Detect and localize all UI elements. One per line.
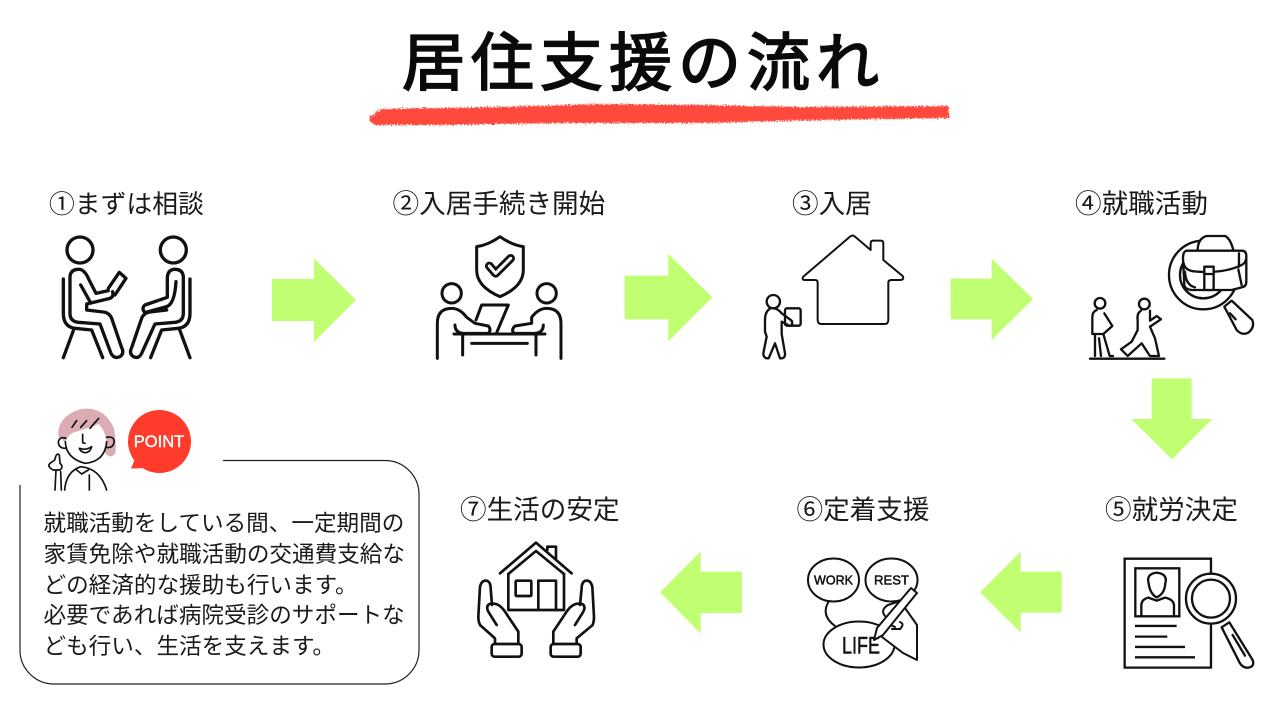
step 6 label: ⑥定着支援	[796, 495, 929, 525]
badge text: POINT	[134, 433, 184, 451]
callout text: ども行い、生活を支えます。	[44, 634, 335, 659]
icon: job search with briefcase and people	[1090, 236, 1253, 359]
rest label: REST	[874, 572, 909, 588]
arrow 4 to 5	[1131, 378, 1212, 459]
title underline brush stroke	[370, 104, 949, 125]
arrow 6 to 7	[660, 551, 742, 633]
step 3 label: ③入居	[792, 189, 872, 219]
callout text: 必要であれば病院受診のサポートな	[44, 603, 405, 628]
step 4 label: ④就職活動	[1075, 189, 1208, 219]
icon: resume with magnifying glass	[1125, 559, 1253, 668]
icon: hands holding a house	[478, 543, 594, 657]
icon: work rest life balance with pencil	[808, 558, 918, 668]
step 7 label: ⑦生活の安定	[460, 495, 620, 525]
callout text: 家賃免除や就職活動の交通費支給な	[44, 542, 405, 567]
panel: point callout	[20, 460, 419, 684]
arrow 5 to 6	[980, 552, 1062, 633]
arrow 1 to 2	[272, 258, 356, 342]
step 5 label: ⑤就労決定	[1105, 495, 1238, 525]
badge: point speech bubble	[128, 410, 191, 473]
step 1 label: ①まずは相談	[49, 190, 204, 219]
life label: LIFE	[842, 632, 880, 660]
title: 居住支援の流れ	[402, 29, 885, 99]
step 2 label: ②入居手続き開始	[392, 189, 605, 219]
callout text: 就職活動をしている間、一定期間の	[44, 511, 404, 536]
callout text: どの経済的な援助も行います。	[44, 573, 358, 598]
hand and pencil	[874, 588, 918, 660]
icon: shield and meeting at a desk	[437, 237, 561, 358]
icon: house and person carrying a box	[763, 235, 903, 358]
arrow 2 to 3	[625, 254, 712, 341]
icon: two people in consultation	[63, 237, 190, 358]
arrow 3 to 4	[951, 258, 1033, 340]
work label: WORK	[814, 572, 853, 588]
icon: person pointing finger	[49, 409, 116, 490]
